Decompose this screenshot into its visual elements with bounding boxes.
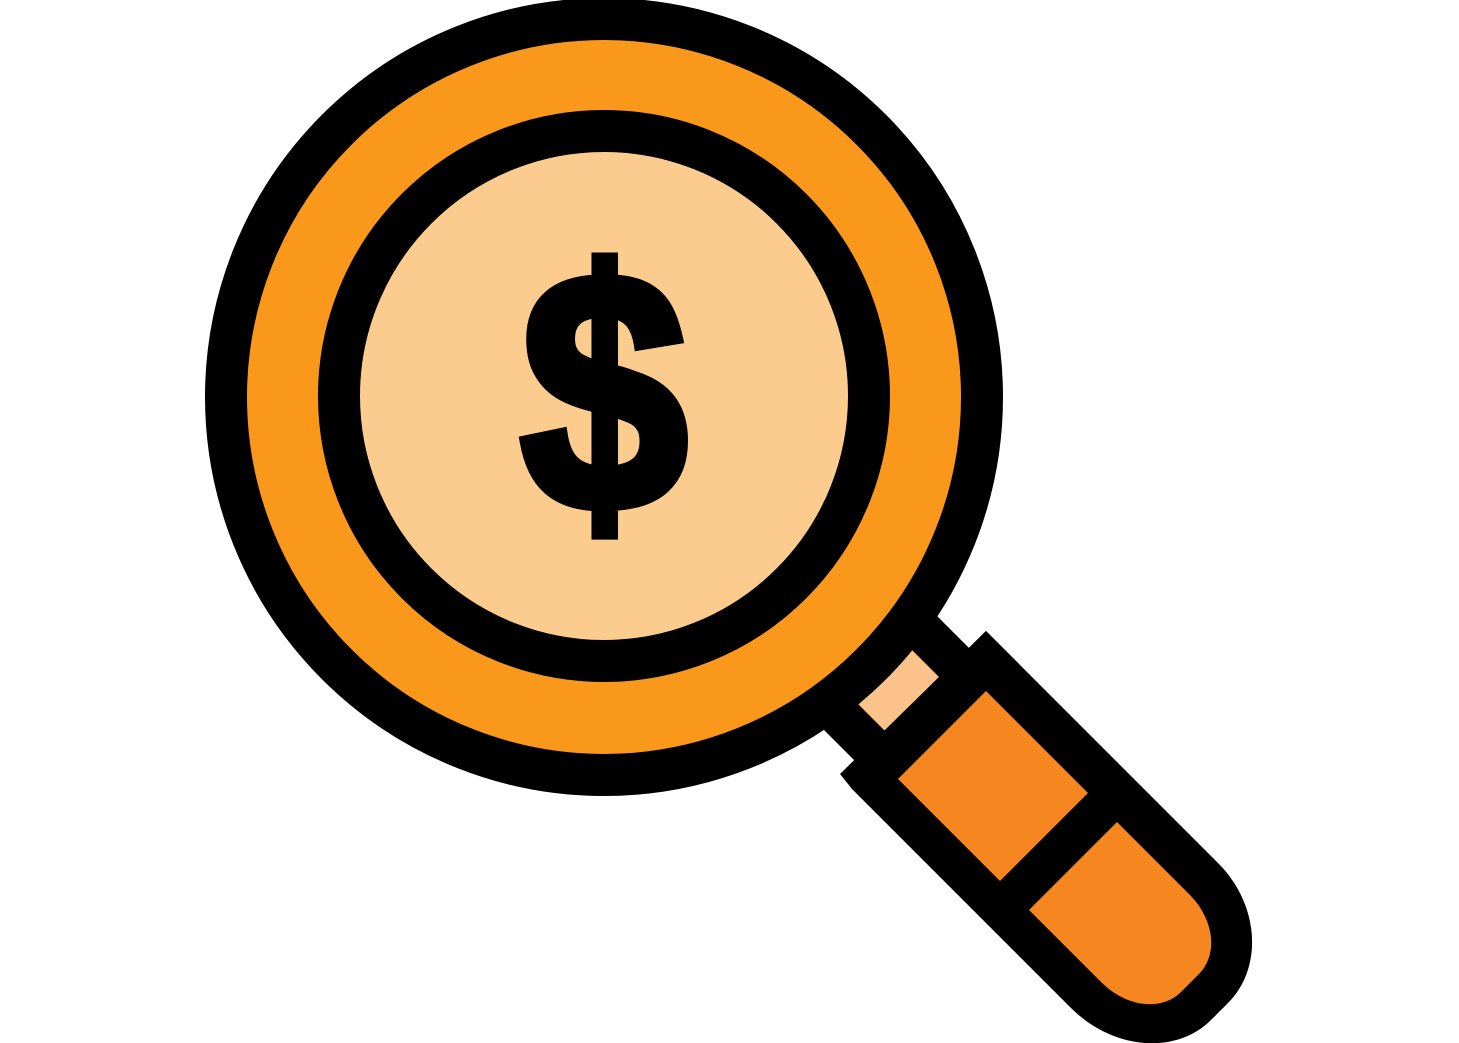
handle upper segment: [898, 691, 1088, 881]
handle lower segment: [1029, 822, 1211, 1004]
dollar sign: $: [521, 205, 687, 581]
handle: [840, 631, 1252, 1043]
lens inner circle: [339, 131, 869, 661]
neck of magnifying glass: [824, 616, 1020, 790]
lens outer ring: [226, 19, 982, 775]
